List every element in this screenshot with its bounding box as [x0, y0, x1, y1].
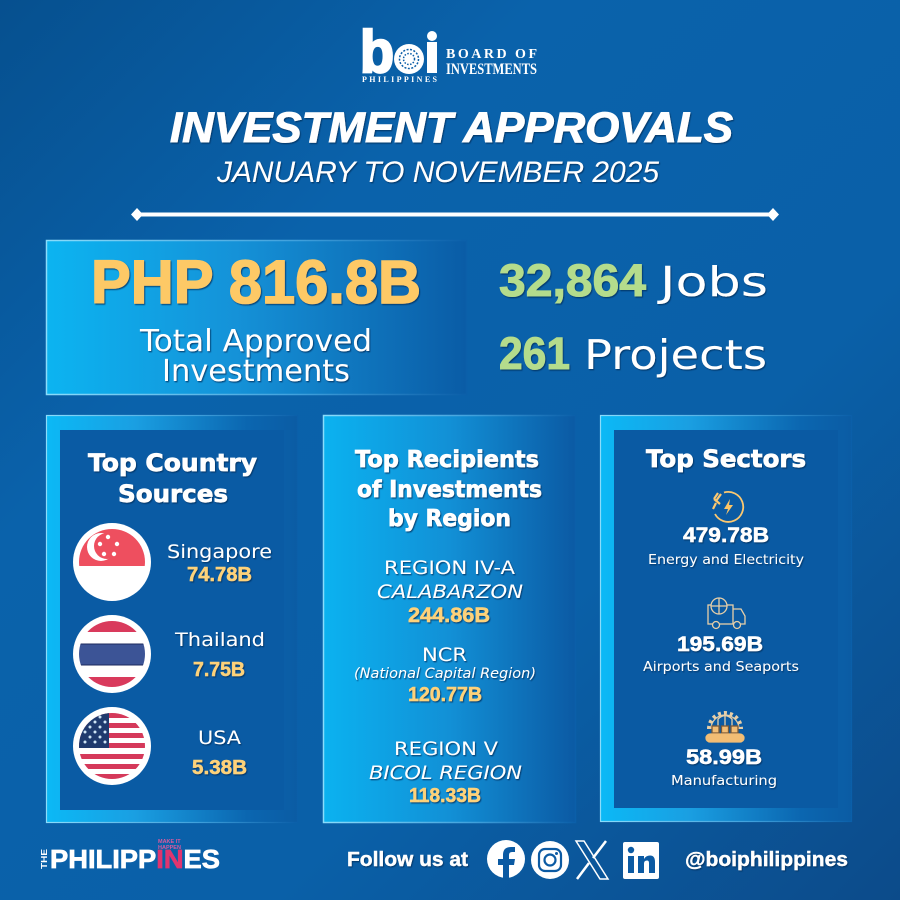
heading: Top Country	[88, 449, 257, 477]
region: Bicol: REGION V	[394, 738, 498, 760]
panel: top country sources	[46, 416, 298, 822]
logo: BOI Philippines: b	[360, 19, 394, 85]
region: Calabarzon: CALABARZON	[377, 581, 523, 603]
logo: The Philippines: THE	[40, 848, 49, 869]
heading	[88, 449, 257, 508]
sector: energy: Energy and Electricity	[648, 552, 804, 568]
icon: USA flag	[70, 707, 154, 785]
heading: Top Sectors	[646, 445, 806, 473]
USA label: 5.38B	[192, 757, 247, 779]
icon: facebook	[487, 840, 525, 878]
icon: truck	[708, 598, 745, 628]
region: NCR: 120.77B	[408, 684, 482, 706]
USA label: USA	[198, 727, 241, 749]
heading	[355, 447, 542, 532]
USA label	[192, 727, 247, 779]
icon: Singapore flag	[70, 523, 154, 601]
stat: jobs: Jobs	[656, 258, 768, 306]
region: Calabarzon: REGION IV-A	[384, 557, 515, 579]
logo: The Philippines: HAPPEN	[158, 845, 181, 851]
sector: energy: 479.78B	[683, 524, 769, 547]
region: NCR	[354, 644, 536, 706]
icon: linkedin	[623, 842, 659, 879]
logo: BOI Philippines: PHILIPPINES	[362, 75, 438, 84]
sector: energy	[648, 524, 804, 568]
stat: projects: 261	[499, 328, 570, 379]
Singapore label: 74.78B	[187, 564, 252, 586]
panel: top sectors	[600, 416, 852, 822]
divider with diamond ends	[131, 208, 779, 221]
icon: manufacturing	[706, 713, 744, 742]
stat: jobs: 32,864	[499, 255, 646, 306]
heading: of Investments	[357, 477, 542, 503]
sector: airports: 195.69B	[677, 633, 763, 656]
Thailand label	[174, 629, 265, 681]
icon: instagram	[531, 841, 569, 879]
sector: manufacturing: Manufacturing	[671, 773, 777, 789]
region: Calabarzon: 244.86B	[408, 604, 490, 627]
Singapore label	[167, 541, 272, 586]
stat: jobs	[499, 255, 768, 306]
total label: Investments	[162, 354, 350, 389]
icon: X	[576, 841, 608, 879]
sector: manufacturing: 58.99B	[686, 746, 762, 769]
region: Bicol	[369, 738, 522, 807]
region: Bicol: 118.33B	[409, 785, 481, 807]
heading: Top Recipients	[355, 447, 539, 473]
logo: The Philippines: MAKE IT	[158, 839, 181, 845]
sector: manufacturing	[671, 746, 777, 789]
Thailand label: 7.75B	[193, 659, 245, 681]
region: Calabarzon	[377, 557, 523, 627]
region: Bicol: BICOL REGION	[369, 762, 522, 784]
sector: airports: Airports and Seaports	[643, 659, 799, 675]
heading: Sources	[118, 480, 228, 508]
heading: by Region	[388, 506, 511, 532]
panel: top recipients by region	[324, 416, 576, 822]
icon: energy	[713, 492, 743, 522]
logo: BOI Philippines: INVESTMENTS	[446, 61, 537, 78]
subtitle: JANUARY TO NOVEMBER 2025	[216, 156, 659, 189]
stat: projects	[499, 328, 767, 379]
Singapore label: Singapore	[167, 541, 272, 563]
logo: BOI Philippines	[360, 19, 537, 85]
total label: Total Approved	[139, 324, 372, 359]
social handle: @boiphilippines	[685, 849, 848, 871]
sector: airports	[643, 633, 799, 675]
icon: Thailand flag	[70, 615, 154, 693]
region: NCR: NCR	[422, 644, 467, 666]
total amount: PHP 816.8B	[91, 248, 421, 316]
title: INVESTMENT APPROVALS	[170, 104, 733, 152]
follow us text: Follow us at	[347, 849, 468, 871]
logo: BOI Philippines: BOARD OF	[446, 47, 537, 62]
logo: The Philippines: PHILIPPINES	[50, 844, 220, 874]
panel: total approved investments	[46, 240, 466, 394]
Thailand label: Thailand	[174, 629, 265, 651]
region: NCR: (National Capital Region)	[354, 666, 536, 682]
total label	[139, 324, 372, 389]
stat: projects: Projects	[584, 331, 767, 379]
